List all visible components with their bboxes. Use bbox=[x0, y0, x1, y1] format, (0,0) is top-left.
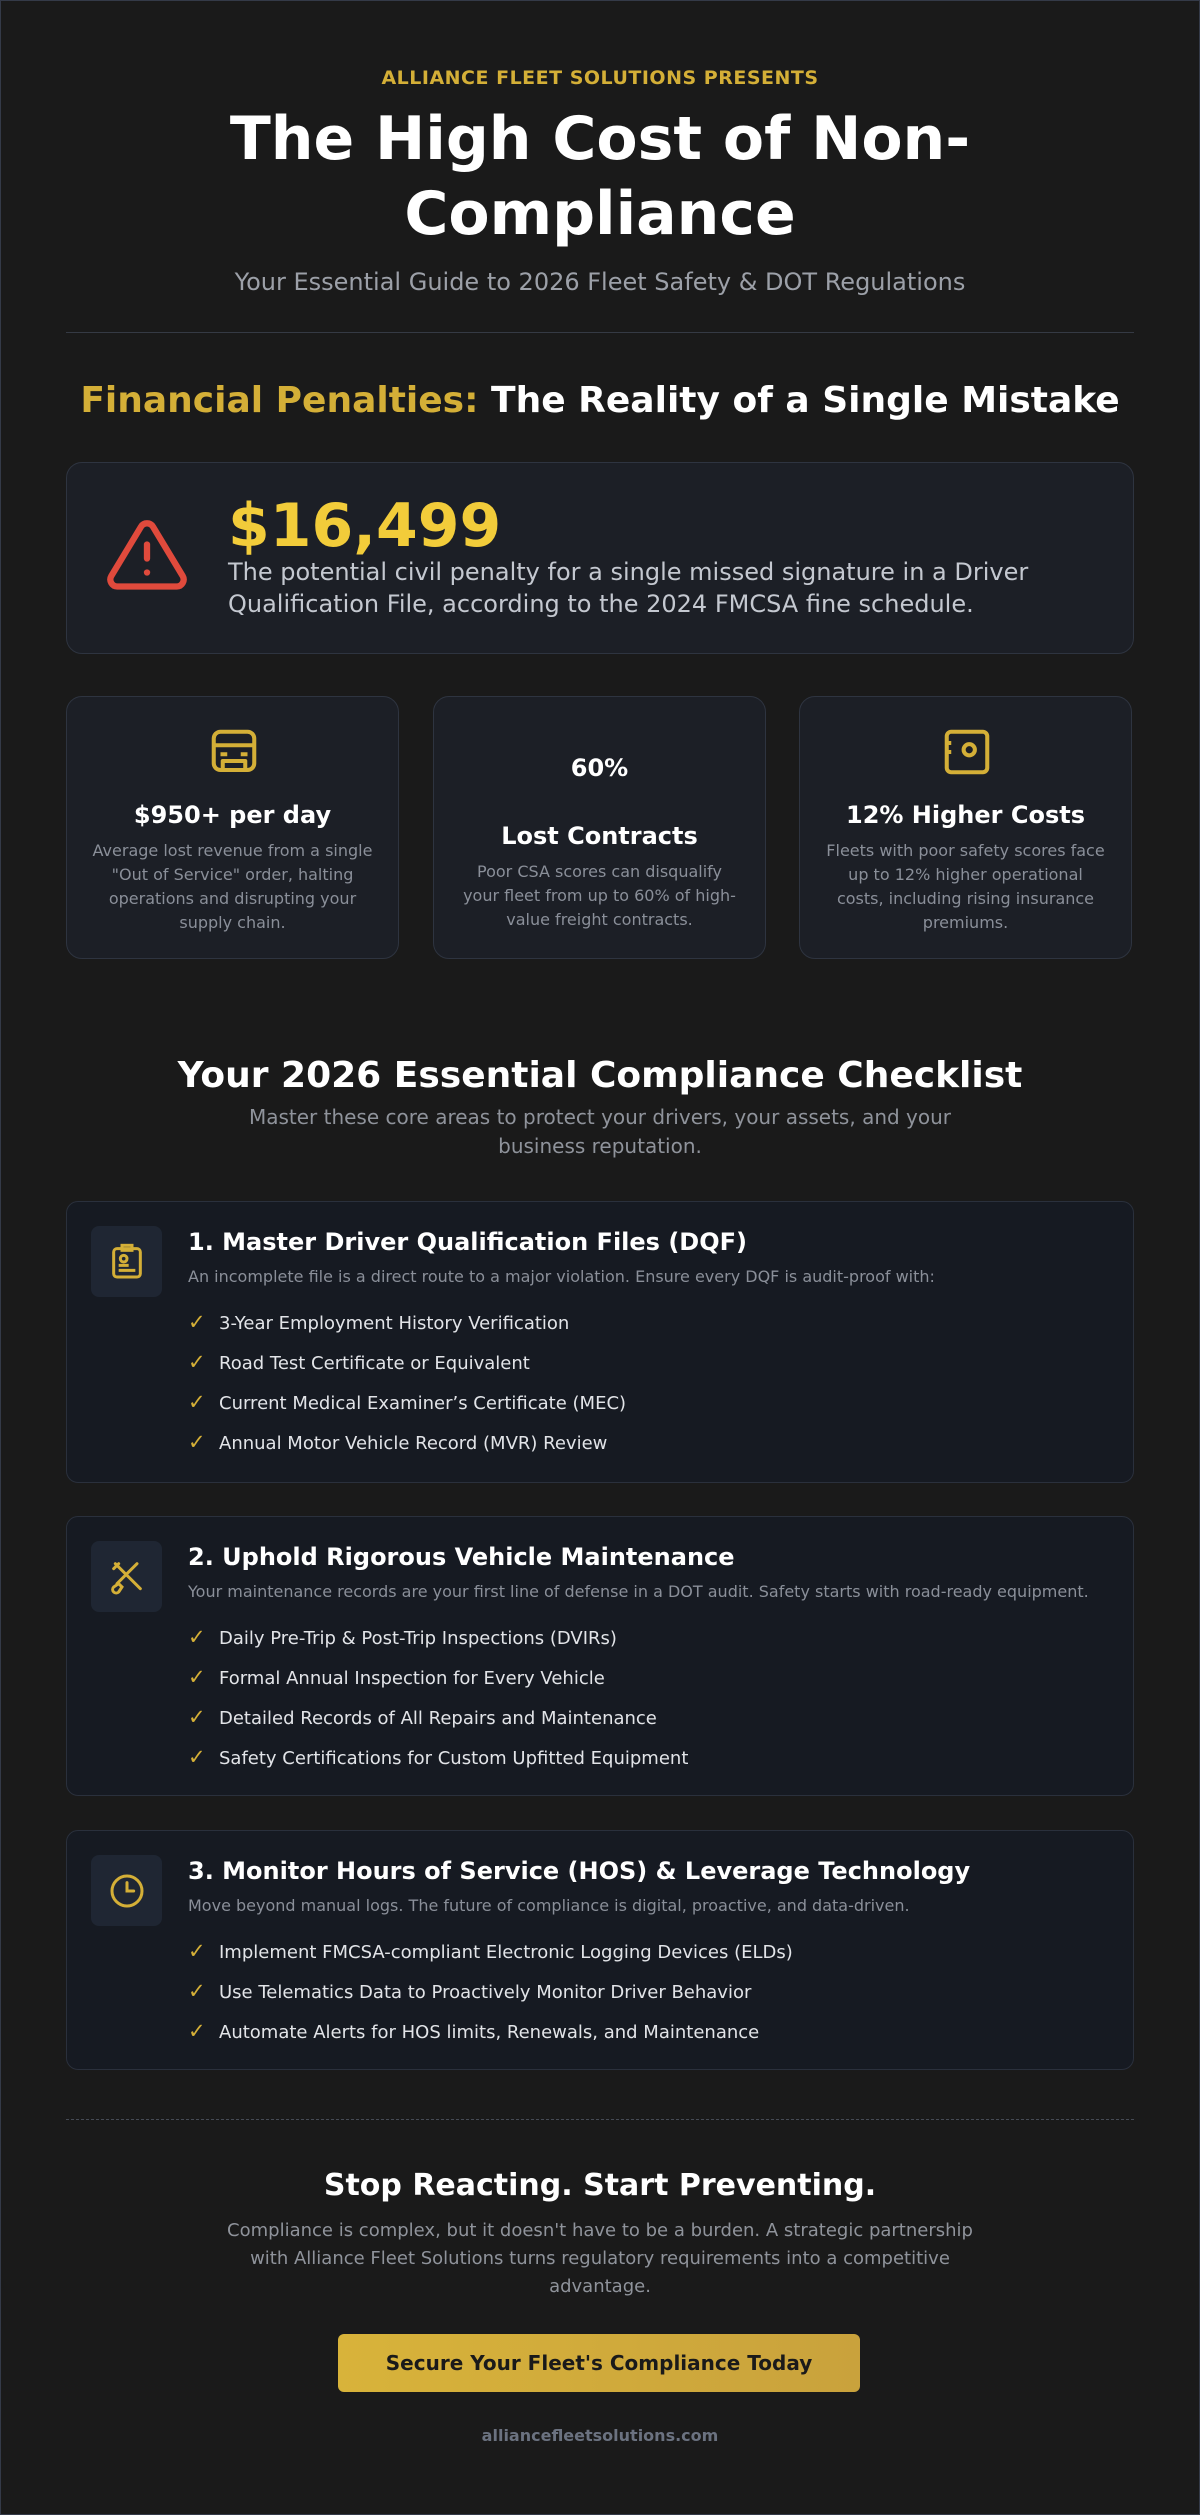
panel: lost contracts: Lost Contracts bbox=[501, 822, 698, 850]
panel: DQF bbox=[66, 1201, 1134, 1483]
panel: big penalty bbox=[66, 462, 1134, 654]
panel: maintenance: 2. Uphold Rigorous Vehicle Maintenance bbox=[188, 1543, 735, 1571]
panel: maintenance: ✓ bbox=[188, 1625, 206, 1649]
checklist subtitle: Master these core areas to protect your drivers, your assets, and your business reputation. bbox=[249, 1105, 951, 1158]
button bbox=[338, 2334, 860, 2392]
panel: DQF: An incomplete file is a direct route to a major violation. Ensure every DQF is audit-proof with: bbox=[188, 1267, 935, 1286]
eyebrow: ALLIANCE FLEET SOLUTIONS PRESENTS bbox=[381, 67, 819, 89]
panel: DQF: ✓ bbox=[188, 1430, 206, 1454]
title bbox=[230, 104, 970, 249]
panel: higher costs: 12% Higher Costs bbox=[846, 801, 1085, 829]
panel: HOS bbox=[66, 1830, 1134, 2070]
description: The potential civil penalty for a single missed signature in a Driver Qualification File, according to the 2024 FMCSA fine schedule. bbox=[228, 558, 1028, 618]
panel: out of service: Average lost revenue from a single "Out of Service" order, halting operations and disrupting your supply chain. bbox=[93, 841, 372, 932]
icon: truck bbox=[212, 730, 256, 772]
panel: HOS: Automate Alerts for HOS limits, Renewals, and Maintenance bbox=[219, 2022, 759, 2043]
panel: higher costs bbox=[799, 696, 1132, 959]
panel: maintenance: ✓ bbox=[188, 1745, 206, 1769]
panel: DQF: Annual Motor Vehicle Record (MVR) Review bbox=[219, 1433, 607, 1454]
footer url: alliancefleetsolutions.com bbox=[482, 2426, 718, 2445]
panel: maintenance: Safety Certifications for Custom Upfitted Equipment bbox=[219, 1748, 688, 1769]
panel: maintenance: Daily Pre-Trip & Post-Trip Inspections (DVIRs) bbox=[219, 1628, 617, 1649]
icon: id badge bbox=[91, 1226, 162, 1297]
panel: DQF: Road Test Certificate or Equivalent bbox=[219, 1353, 530, 1374]
panel: DQF: 1. Master Driver Qualification Files (DQF) bbox=[188, 1228, 747, 1256]
CTA text: Compliance is complex, but it doesn't have to be a burden. A strategic partnership with Alliance Fleet Solutions turns regulatory requirements into a competitive advantage. bbox=[227, 2220, 973, 2297]
icon: tools bbox=[91, 1541, 162, 1612]
panel: lost contracts: Poor CSA scores can disqualify your fleet from up to 60% of high-value freight contracts. bbox=[463, 862, 736, 929]
panel: DQF: ✓ bbox=[188, 1310, 206, 1334]
stat number: $16,499 bbox=[228, 491, 501, 561]
panel: maintenance: Detailed Records of All Repairs and Maintenance bbox=[219, 1708, 657, 1729]
panel: lost contracts bbox=[433, 696, 766, 959]
icon: safe bbox=[944, 730, 990, 774]
panel: HOS: ✓ bbox=[188, 1939, 206, 1963]
title: Compliance bbox=[404, 179, 796, 249]
panel: higher costs: Fleets with poor safety scores face up to 12% higher operational costs, including rising insurance premiums. bbox=[826, 841, 1105, 932]
panel: HOS: 3. Monitor Hours of Service (HOS) & Leverage Technology bbox=[188, 1857, 970, 1885]
panel: DQF: ✓ bbox=[188, 1390, 206, 1414]
panel: HOS: Implement FMCSA-compliant Electronic Logging Devices (ELDs) bbox=[219, 1942, 793, 1963]
panel: maintenance bbox=[66, 1516, 1134, 1796]
heading: financial penalties: Financial Penalties: The Reality of a Single Mistake bbox=[80, 380, 1120, 421]
panel: HOS: ✓ bbox=[188, 1979, 206, 2003]
panel: DQF: 3-Year Employment History Verification bbox=[219, 1313, 569, 1334]
panel: maintenance: Formal Annual Inspection for Every Vehicle bbox=[219, 1668, 605, 1689]
panel: maintenance: ✓ bbox=[188, 1705, 206, 1729]
panel: HOS: Move beyond manual logs. The future of compliance is digital, proactive, and data-driven. bbox=[188, 1896, 910, 1915]
panel: HOS: Use Telematics Data to Proactively Monitor Driver Behavior bbox=[219, 1982, 751, 2003]
panel: out of service: $950+ per day bbox=[134, 801, 331, 829]
panel: DQF: ✓ bbox=[188, 1350, 206, 1374]
panel: HOS: ✓ bbox=[188, 2019, 206, 2043]
panel: maintenance: ✓ bbox=[188, 1665, 206, 1689]
icon: warning bbox=[107, 520, 187, 590]
panel: out of service bbox=[66, 696, 399, 959]
button: Secure Your Fleet's Compliance Today bbox=[386, 2351, 812, 2375]
title: The High Cost of Non- bbox=[230, 104, 970, 174]
panel: DQF: Current Medical Examiner’s Certificate (MEC) bbox=[219, 1393, 626, 1414]
subtitle: Your Essential Guide to 2026 Fleet Safety & DOT Regulations bbox=[235, 268, 965, 296]
panel: maintenance: Your maintenance records are your first line of defense in a DOT audit. Safety starts with road-ready equipment. bbox=[188, 1582, 1089, 1601]
heading: CTA: Stop Reacting. Start Preventing. bbox=[324, 2168, 876, 2203]
panel: lost contracts: 60% bbox=[571, 754, 628, 782]
heading: checklist: Your 2026 Essential Compliance Checklist bbox=[178, 1055, 1022, 1096]
icon: clock bbox=[91, 1855, 162, 1926]
